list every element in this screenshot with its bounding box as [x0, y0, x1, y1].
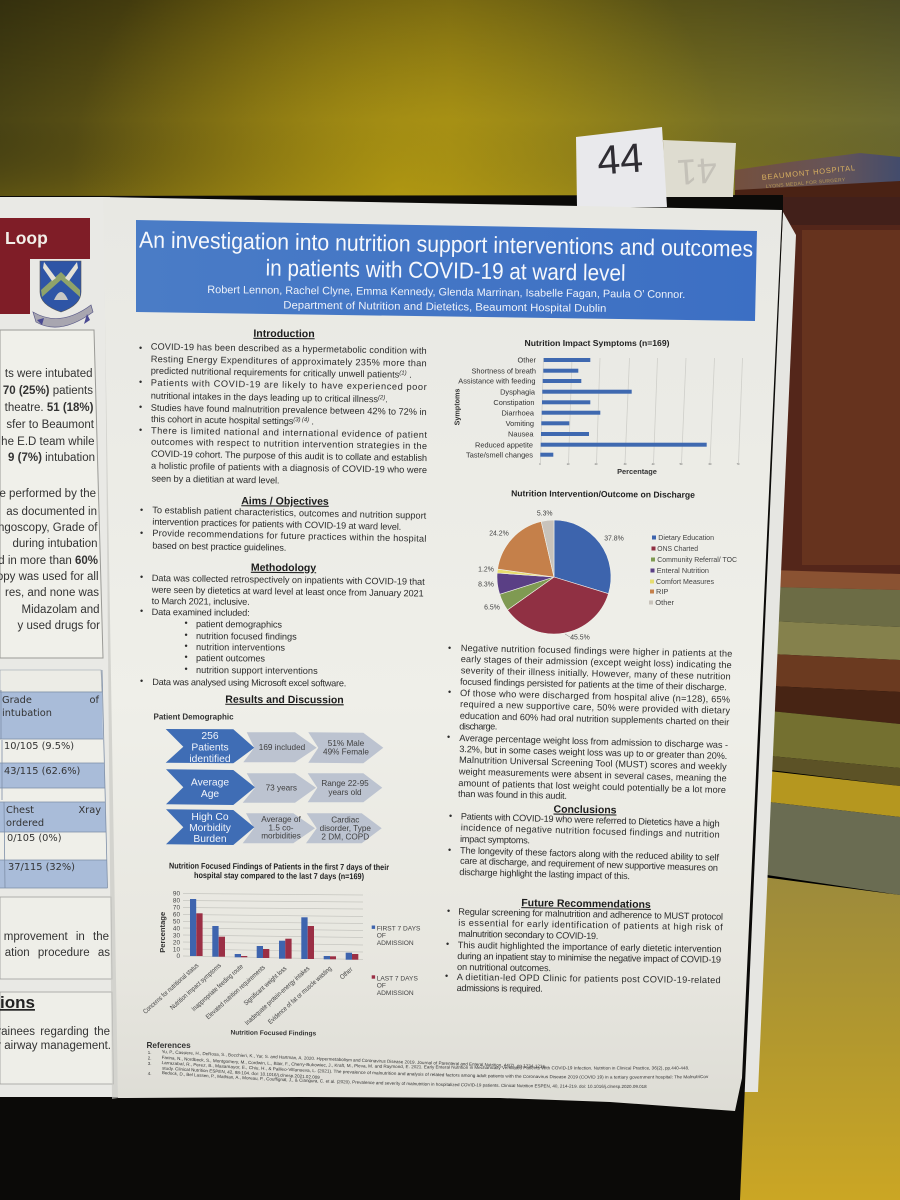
chart: nutrition impact symptoms: Percentage [617, 467, 657, 476]
bar chart legend: FIRST 7 DAYS [377, 926, 421, 932]
neighbouring poster text box: Midazolam and [22, 604, 100, 616]
section: methodology: • [140, 676, 143, 686]
references: Yu, P., Cassiere, H., DeRosa, S., Bocchieri, K., Yar, S. and Hartman, A. 2020. Hypermetabolism and Coronavirus Disease 2019. Journal of Parenteral and Enteral Nutrition, 44(7), pp.1234-1236. [162, 1050, 546, 1068]
references: study. Clinical Nutrition ESPEN, 42, 98-104. doi: 10.1016/j.clnesp.2021.02.009 [162, 1066, 321, 1080]
section: introduction: . [385, 394, 388, 404]
section: introduction: predicted nutritional requirements for critically unwell patients [151, 366, 399, 380]
neighbouring poster table: Grade [2, 695, 32, 706]
patient demographic chevrons: Age [201, 789, 219, 800]
neighbouring poster box: recommendations [0, 992, 114, 1084]
section: results discussion text: • [448, 687, 451, 697]
title banner: Department of Nutrition and Dietetics, Beaumont Hospital Dublin [283, 300, 606, 315]
symptom axis ticks: 70 [737, 463, 740, 466]
bar chart: nutrition focused findings: Percentage [158, 912, 167, 953]
symptom labels: Nausea [508, 430, 534, 439]
number card 41: 41 [676, 150, 718, 193]
section: results discussion text: Malnutrition Universal Screening Tool (MUST) scores and weekly [459, 755, 727, 772]
section: conclusions: Patients with COVID-19 who were referred to Dietetics have a high [461, 811, 720, 829]
chart: nutrition impact symptoms [452, 338, 742, 476]
section: conclusions: impact symptoms. [460, 834, 530, 845]
section: future recommendations [445, 897, 723, 994]
pie legend [649, 533, 738, 607]
first 7 days bars [190, 899, 352, 960]
section: introduction: (3) (4) [293, 417, 309, 423]
section: conclusions [448, 804, 720, 881]
section: results discussion text: required a new supportive care, 50% were provided with dietary [460, 699, 731, 716]
symptom axis ticks: 60 [709, 463, 712, 466]
title banner: An investigation into nutrition support interventions and outcomes [139, 227, 753, 262]
pie legend: Other [655, 598, 675, 607]
section: methodology: • [184, 652, 188, 662]
neighbouring poster box: recommendations: rainees regarding the [0, 1026, 110, 1038]
pie slices [497, 520, 611, 634]
bar chart legend: ADMISSION [377, 990, 414, 997]
references [146, 1041, 708, 1089]
symptom labels: Reduced appetite [475, 440, 533, 449]
section: introduction: COVID-19 cohort. The purpose of this audit is to collate and establish [151, 449, 427, 463]
section: results discussion text: Average percentage weight loss from admission to discharge was - [459, 733, 728, 750]
section: results discussion text: discharge. [459, 721, 497, 731]
x axis category labels: Elevated nutrition requirements [205, 964, 267, 1021]
pie legend: ONS Charted [657, 544, 698, 553]
patient demographic chevrons: Range 22-95 [321, 779, 369, 788]
bar chart legend: ADMISSION [377, 940, 414, 947]
section: results discussion text: • [448, 643, 451, 653]
section: methodology: • [184, 630, 188, 640]
symptom labels: Diarrhoea [502, 408, 535, 417]
pie value labels [478, 510, 624, 642]
patient demographic chevrons: High Co [191, 812, 229, 823]
chart title [169, 861, 390, 881]
x axis category labels: Inadequate protein-energy intakes [244, 965, 312, 1027]
section: methodology: • [184, 641, 188, 651]
neighbouring poster text box: res, and none was [5, 587, 99, 599]
neighbouring poster text box: 9 (7%) intubation [8, 452, 95, 464]
section: introduction: Studies have found malnutrition prevalence between 42% to 72% in [151, 403, 427, 417]
patient demographic chevrons: 49% Female [323, 748, 369, 756]
display board and backing sheet [0, 195, 796, 1200]
wooden plaque: Beaumont Hospital: BEAUMONT HOSPITAL [761, 163, 856, 182]
section: conclusions: incidence of negative nutrition focused findings and nutrition [461, 822, 720, 840]
pie value labels: 45.5% [570, 634, 590, 642]
symptom axis ticks: 20 [595, 463, 598, 466]
neighbouring poster text box: ts were intubated [5, 368, 92, 380]
section: future recommendations: A dietitian-led OPD Clinic for patients post COVID-19-related [457, 972, 721, 985]
references: 1. [148, 1050, 151, 1055]
section: conclusions: • [448, 845, 451, 855]
section: results discussion text: Negative nutrition focused findings were higher in patients at the [461, 643, 732, 659]
patient demographic chevrons: 73 years [266, 784, 297, 792]
y axis labels: 40 [173, 926, 180, 932]
section: aims and objectives: based on best practice guidelines. [152, 541, 286, 553]
pie legend: Enteral Nutrition [657, 566, 709, 575]
section: methodology: • [184, 618, 188, 628]
pie chart: nutrition intervention and outcome [478, 488, 738, 642]
patient demographic chevrons: Morbidity [189, 823, 232, 834]
section: future recommendations: This audit highlighted the importance of early dietetic intervention [458, 940, 722, 954]
y axis labels: 70 [173, 905, 180, 912]
section: introduction: . [407, 370, 412, 380]
bar chart legend: OF [377, 932, 386, 940]
section: aims and objectives: Provide recommendations for future practices within the hospital [152, 528, 426, 544]
bar chart legend: OF [377, 982, 386, 990]
references: Bedock, D., Bel Lassen, P., Mathian, A., Moreau, P., Couffignal, J., & Ciangura, C. et al. (2020). Prevalence and severity of malnutrition in hospitalized COVID-19 patients. Clinical Nutrition ESPEN, 40, 214-219. doi: 10.1016/j.clnesp.2020.09.018 [162, 1071, 646, 1089]
neighbouring poster table [0, 670, 108, 888]
number card 41 [663, 140, 736, 197]
section: aims and objectives: • [140, 528, 143, 538]
bar chart legend: LAST 7 DAYS [377, 975, 418, 982]
neighbouring poster text box: sfer to Beaumont [6, 419, 95, 431]
neighbouring poster text box: 70 (25%) patients [3, 385, 93, 397]
symptom labels: Constipation [493, 398, 534, 407]
section: methodology: nutrition interventions [196, 642, 285, 653]
neighbouring poster table: Chest [6, 805, 34, 816]
neighbouring poster text box: he E.D team while [1, 436, 94, 448]
pie value labels: 24.2% [489, 530, 509, 538]
section: methodology: to March 2021, inclusive. [152, 596, 250, 607]
icon: hospital crest [33, 261, 93, 327]
patient demographic chevrons: Average of [261, 815, 301, 824]
pie value labels: 37.8% [604, 536, 624, 542]
section: results discussion text: focused findings persisted for patients at the time of their discharge. [460, 677, 727, 692]
section: aims and objectives: intervention practices for patients with COVID-19 at ward level. [152, 517, 401, 532]
symptom labels [458, 356, 537, 459]
section: conclusions: The longevity of these factors along with the reduced ability to self [460, 845, 720, 863]
y axis labels: 10 [173, 946, 180, 954]
y axis labels: 90 [173, 891, 180, 898]
neighbouring poster box: recommendations: ions [0, 993, 35, 1012]
x axis category labels: Concerns for nutritional status [142, 962, 201, 1016]
section: results discussion text: weight measurements were absent in several cases, meaning the [458, 766, 727, 783]
section: results discussion text: early stages of their admission (except weight loss) indicating the [461, 654, 732, 670]
section: conclusions: Conclusions [553, 804, 617, 816]
symptom labels: Shortness of breath [471, 366, 536, 375]
symptom axis ticks: 40 [652, 463, 655, 466]
section: future recommendations: on nutritional outcomes. [457, 962, 551, 973]
symptom axis ticks: 50 [680, 463, 683, 466]
main poster sheet [103, 197, 782, 1111]
section: results discussion text: than was found in this audit. [458, 789, 567, 801]
section: results discussion text: 3.2%, but in some cases weight loss was up to or greater than 20%. [459, 744, 727, 761]
section: results discussion text: amount of patients that lost weight could potentially be a lot more [458, 778, 726, 795]
patient demographic chevrons: 2 DM, COPD [321, 832, 369, 842]
patient demographic chevrons: 169 included [259, 743, 306, 752]
section: introduction: Patients with COVID-19 are likely to have experienced poor [151, 378, 427, 392]
section: methodology: Data was analysed using Microsoft excel software. [152, 677, 346, 688]
bar chart: nutrition focused findings: Nutrition Focused Findings [230, 1030, 317, 1037]
section: introduction [139, 328, 428, 486]
neighbouring poster box: improvement: mprovement in the [4, 931, 109, 943]
y axis labels: 20 [173, 940, 180, 946]
section: introduction: outcomes with respect to nutrition intervention strategies in the [151, 437, 427, 451]
pie value labels: 1.2% [478, 566, 494, 574]
x axis category labels [142, 962, 355, 1027]
section: introduction: seen by a dietitian at ward level. [151, 474, 280, 486]
section: future recommendations: • [447, 906, 450, 916]
section: introduction: • [139, 425, 142, 435]
section: methodology: Data was collected retrospectively on inpatients with COVID-19 that [152, 573, 425, 587]
section: introduction: (2) [378, 395, 385, 401]
neighbouring poster box: improvement [0, 897, 112, 979]
neighbouring poster text box: y used drugs for [18, 620, 100, 632]
y axis labels: 60 [173, 912, 180, 918]
section: methodology: • [184, 664, 188, 674]
section: methodology: patient demographics [196, 619, 282, 630]
section: aims and objectives: Aims / Objectives [241, 495, 329, 508]
section: introduction: • [139, 402, 142, 412]
symptom labels: Dysphagia [500, 387, 536, 396]
pie legend: Comfort Measures [656, 577, 714, 586]
section: introduction: nutritional intakes in the days leading up to critical illness [151, 391, 378, 404]
section: results discussion text: Of those who were discharged from hospital alive (n=128), 65% [460, 688, 730, 705]
patient demographic chevrons: Average [191, 778, 229, 788]
section: introduction: • [139, 343, 142, 353]
section: introduction: Resting Energy Expenditures of approximately 235% more than [151, 354, 427, 368]
section: introduction: . [309, 416, 314, 427]
neighbouring poster at left [0, 197, 120, 1097]
section: methodology: were seen by dietetics at ward level at least once from January 2021 [151, 585, 424, 598]
patient demographic chevrons: Burden [193, 834, 227, 845]
patient demographic chevrons: Cardiac [331, 816, 359, 825]
section: results discussion text: severity of their illness initially. However, many of these nutrition [461, 665, 731, 682]
y axis labels: 50 [173, 918, 180, 926]
symptom labels: Vomiting [506, 419, 534, 428]
section: methodology: nutrition focused findings [196, 631, 297, 642]
symptom labels: Other [518, 356, 537, 365]
chart: nutrition impact symptoms: Symptoms [452, 389, 462, 425]
section: methodology: nutrition support interventions [196, 665, 318, 676]
neighbouring poster table: ordered [6, 818, 44, 829]
patient demographic chevrons: morbidities [261, 832, 301, 841]
pie value labels: 5.3% [537, 510, 553, 518]
section: conclusions: care at discharge, and requirement of new supportive measures on [460, 856, 718, 873]
section: methodology: • [140, 572, 143, 582]
section: introduction: COVID-19 has been described as a hypermetabolic condition with [151, 342, 427, 356]
neighbouring poster banner [0, 218, 90, 314]
number card 44: 44 [596, 134, 644, 184]
pie value labels: 8.3% [478, 582, 494, 588]
neighbouring poster box: improvement: ation procedure as [5, 947, 110, 959]
patient demographic chevrons [154, 712, 383, 845]
section: aims and objectives: • [140, 505, 143, 515]
pie value labels: 6.5% [484, 604, 500, 612]
neighbouring poster text box [0, 330, 103, 658]
chart: nutrition impact symptoms: Nutrition Impact Symptoms (n=169) [525, 338, 670, 348]
heading: results and discussion: Results and Discussion [225, 694, 344, 706]
section: introduction: this cohort in acute hospital settings [151, 414, 293, 426]
section: methodology: patient outcomes [196, 653, 265, 663]
patient demographic chevrons: years old [328, 788, 362, 797]
pie legend: RIP [656, 587, 668, 596]
y axis labels: 0 [176, 953, 180, 960]
symptom axis ticks: 0 [539, 463, 541, 466]
symptom axis ticks: 30 [624, 463, 627, 466]
wooden plaque: Beaumont Hospital [735, 153, 900, 197]
x axis category labels: Evidence of fat or muscle wasting [267, 965, 333, 1026]
references: 4. [148, 1071, 151, 1076]
neighbouring poster table: intubation [2, 708, 52, 719]
neighbouring poster table: 10/105 (9.5%) [4, 741, 74, 752]
title banner: in patients with COVID-19 at ward level [265, 255, 626, 286]
title banner [136, 220, 757, 321]
number card 44 [576, 127, 667, 207]
symptom axis ticks [539, 463, 740, 466]
section: results discussion text: education and 60% had oral nutrition supplements charted on their [460, 711, 729, 727]
section: introduction: There is limited national and international evidence of patient [151, 426, 428, 440]
references: Farina, N., Nordbeck, S., Montgomery, M., Cordwin, L., Blair, F., Cherry-Bukowiec, J., Kraft, M., Pleva, M. and Raymond, E. 2021. Early Enteral Nutrition in Mechanically Ventilated Patients With COVID-19 Infection. Nutrition in Clinical Practice, 36(2), pp.440-448. [162, 1056, 689, 1070]
section: introduction: a holistic profile of patients with a diagnosis of COVID-19 who were [151, 461, 427, 475]
patient demographic chevrons: 51% Male [328, 739, 365, 748]
neighbouring poster table: 37/115 (32%) [8, 862, 75, 873]
section: introduction: Introduction [253, 328, 315, 340]
section: methodology: Data examined included: [152, 607, 250, 618]
section: future recommendations: • [445, 971, 448, 981]
section: introduction: • [139, 377, 142, 387]
bar chart legend [372, 926, 421, 997]
neighbouring poster text box: e performed by the [0, 488, 96, 500]
x axis category labels: Inappropriate feeding route [191, 963, 245, 1013]
section: future recommendations: • [446, 939, 449, 949]
neighbouring poster table: Xray [78, 805, 101, 816]
neighbouring poster text box: as documented in [6, 506, 97, 518]
neighbouring poster text box: d in more than 60% [0, 555, 98, 567]
x axis category labels: Other [339, 966, 355, 981]
section: future recommendations: Regular screening for malnutrition and adherence to MUST protocol [458, 907, 723, 922]
section: future recommendations: malnutrition secondary to COVID-19. [458, 929, 598, 941]
section: results discussion text [447, 643, 732, 801]
section: future recommendations: during an inpatient stay to minimise the negative impact of COVID-19 [457, 951, 721, 965]
neighbouring poster table: 43/115 (62.6%) [4, 766, 80, 777]
section: methodology: Methodology [251, 562, 316, 574]
bar chart: nutrition focused findings [142, 861, 421, 1037]
neighbouring poster table: of [90, 695, 100, 706]
section: results discussion text: • [447, 732, 450, 742]
symptom labels: Taste/smell changes [466, 450, 533, 459]
references: References [146, 1041, 191, 1050]
references: 3. [148, 1061, 151, 1066]
patient demographic chevrons: 256 [201, 731, 219, 742]
patient demographic chevrons: disorder, Type [320, 824, 371, 833]
chart title: Nutrition Focused Findings of Patients in the first 7 days of their [169, 861, 390, 872]
symptom labels: Assistance with feeding [458, 377, 536, 386]
section: future recommendations: Future Recommendations [521, 897, 651, 911]
title banner: Robert Lennon, Rachel Clyne, Emma Kennedy, Glenda Marrinan, Isabelle Fagan, Paula O’ Connor. [207, 284, 685, 301]
y axis labels [173, 891, 180, 960]
y axis labels: 80 [173, 898, 180, 905]
neighbouring poster text box: during intubation [12, 538, 98, 550]
references: 2. [148, 1056, 151, 1060]
last 7 days bars [196, 913, 358, 960]
patient demographic chevrons: identified [189, 754, 231, 765]
wooden plaque: Beaumont Hospital: LYONS MEDAL FOR SURGERY [766, 177, 846, 190]
references: Larrazabal, R., Perez, B., Masamayor, E., Chiu, H., & Palileo-Villanueva, L. (2021). The prevalence of malnutrition and analysis of related factors among adult patients with the Coronavirus Disease 2019 (COVID 19) in a tertiary government hospital: The MalnutriCov [162, 1061, 708, 1080]
pie legend: Dietary Education [658, 533, 714, 542]
pie chart: nutrition intervention and outcome: Nutrition Intervention/Outcome on Discharge [511, 488, 695, 500]
neighbouring poster table: 0/105 (0%) [7, 833, 62, 844]
x axis category labels: Nutrition impact symptoms [169, 962, 223, 1012]
symptom bars [540, 358, 707, 457]
section: methodology [140, 562, 425, 688]
x axis category labels: Significant weight loss [243, 965, 289, 1007]
section: methodology: • [140, 606, 143, 616]
patient demographic chevrons: Patient Demographic [154, 712, 234, 722]
section: future recommendations: admissions is required. [457, 983, 543, 994]
neighbouring poster text box: theatre. 51 (18%) [5, 402, 94, 414]
chart title: hospital stay compared to the last 7 days (n=169) [194, 870, 364, 881]
section: introduction: (1) [399, 371, 407, 377]
y axis labels: 30 [173, 932, 180, 940]
patient demographic chevrons: 1.5 co- [268, 824, 294, 833]
section: future recommendations: is essential for early identification of patients at high risk of [458, 918, 723, 932]
patient demographic chevrons: Patients [191, 742, 229, 754]
section: aims and objectives: To establish patient characteristics, outcomes and nutrition support [152, 505, 427, 521]
section: aims and objectives [140, 495, 427, 553]
section: conclusions: • [449, 811, 452, 821]
neighbouring poster banner: Loop [5, 228, 48, 248]
pie legend: Community Referral/ TOC [657, 555, 738, 564]
section: conclusions: discharge highlight the lasting impact of this. [459, 867, 630, 881]
symptom axis ticks: 10 [567, 463, 570, 466]
